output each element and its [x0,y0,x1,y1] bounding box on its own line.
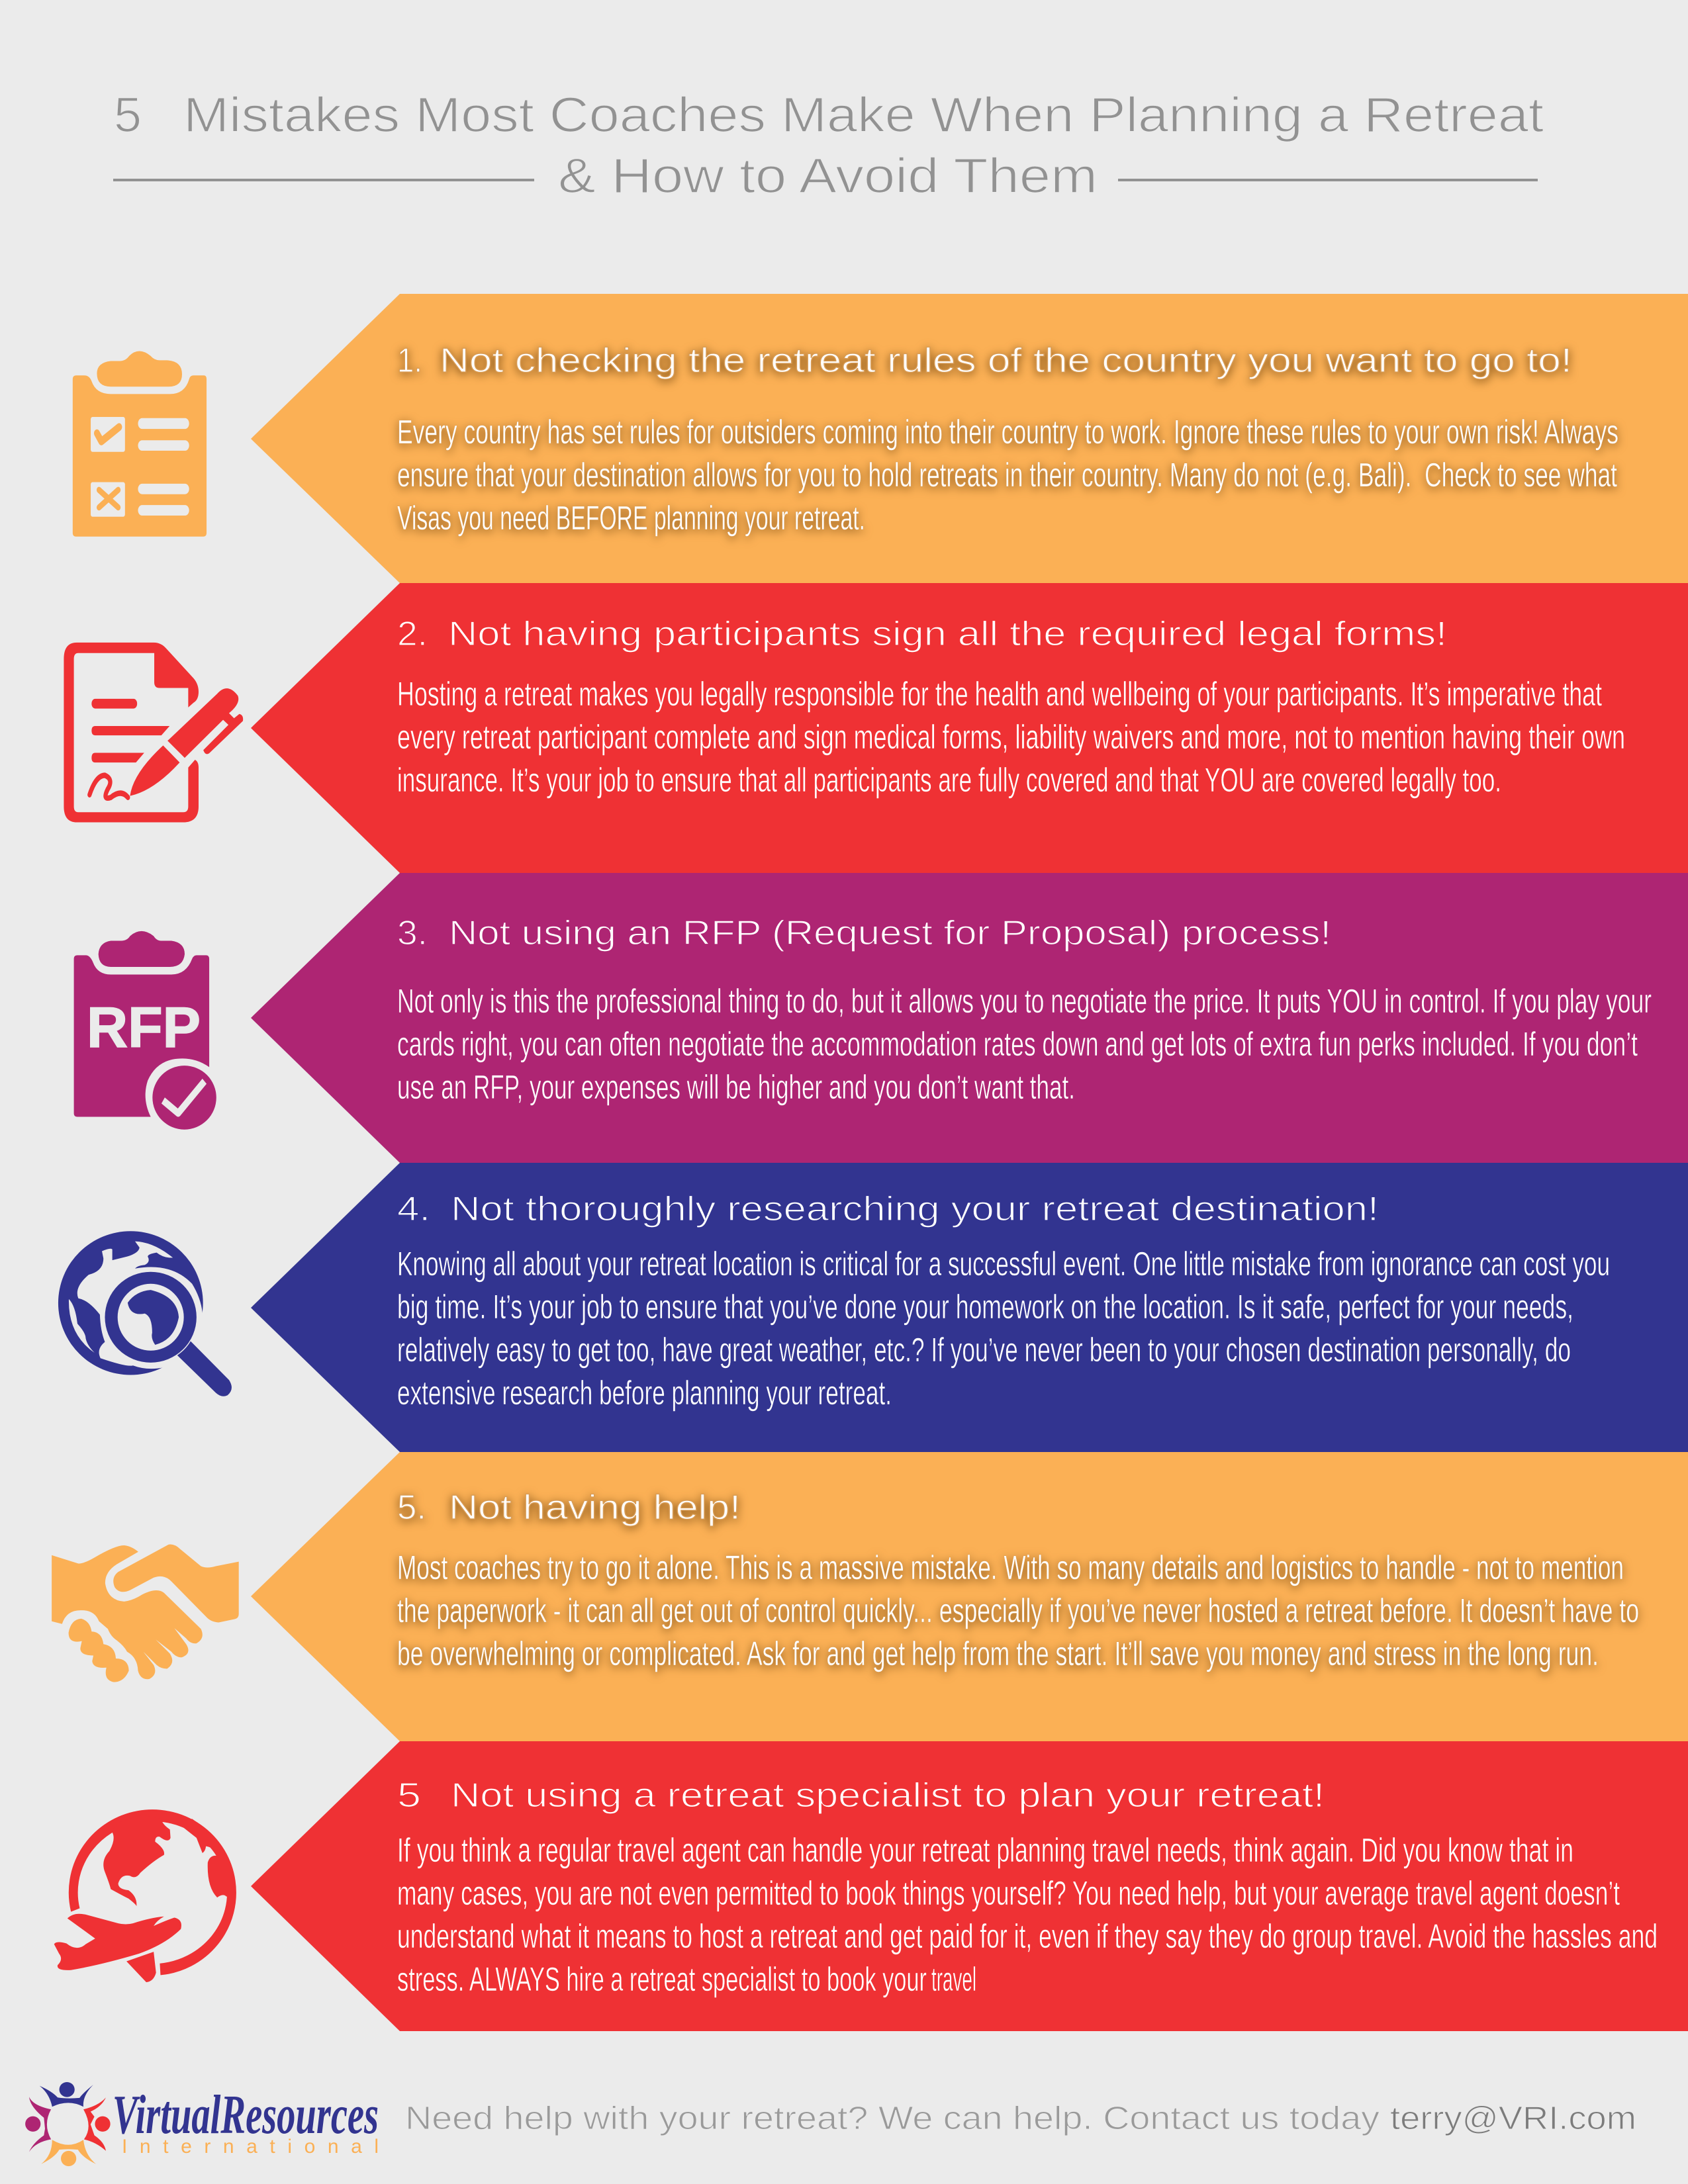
panel: mistake 5 (specialist) [251,1741,1688,2031]
subtitle with rules: & How to Avoid Them [558,148,1098,203]
logo: Virtual Resources International [25,2082,379,2166]
body text 5 [397,1549,1639,1672]
icon: RFP clipboard [74,931,216,1130]
heading 5: 5. [397,1488,426,1527]
title: 5 [114,87,142,142]
heading 3: 3. [397,914,428,952]
panel: mistake 4 [251,1163,1688,1452]
heading 4: 4. [397,1190,430,1228]
body text 6 [397,1831,1658,1998]
title: Mistakes Most Coaches Make When Planning a Retreat [183,87,1544,142]
body text 1: Visas you need BEFORE planning your retreat. [397,499,865,537]
heading 3: Not using an RFP (Request for Proposal) process! [449,914,1331,952]
body text 3 [397,982,1652,1106]
icon: document and pen [64,643,243,823]
body text 2 [397,675,1625,799]
subtitle with rules [113,148,1538,203]
icon: handshake [52,1545,239,1682]
heading 2: Not having participants sign all the required legal forms! [448,615,1447,653]
panel: mistake 3 [251,873,1688,1163]
panel: mistake 1 [251,294,1688,583]
footer call to action [405,2101,1636,2136]
body text 4: extensive research before planning your retreat. [397,1374,892,1412]
body text 3: use an RFP, your expenses will be higher and you don’t want that. [397,1068,1075,1106]
heading 4: Not thoroughly researching your retreat destination! [451,1190,1379,1228]
logo: Virtual Resources International: VirtualResources [113,2084,379,2146]
heading 2: 2. [397,615,428,653]
heading 6: 5 [397,1776,421,1815]
body text 6: travel [931,1960,976,1998]
icon: globe and airplane [54,1815,234,1982]
heading 5: Not having help! [449,1488,741,1527]
heading 1: Not checking the retreat rules of the country you want to go to! [440,341,1572,380]
panel: mistake 5 (help) [251,1452,1688,1741]
heading 1: 1. [397,341,422,380]
heading 6: Not using a retreat specialist to plan your retreat! [451,1776,1325,1815]
icon: globe and magnifier [58,1231,232,1396]
body text 6: stress. ALWAYS hire a retreat specialist to book your [397,1960,927,1998]
logo mark [25,2082,111,2166]
logo: Virtual Resources International: International [122,2136,379,2158]
icon: RFP clipboard: RFP [87,996,201,1060]
panel: mistake 2 [251,583,1688,873]
body text 1 [397,413,1618,537]
body text 4 [397,1245,1610,1412]
icon: clipboard checklist [73,351,207,537]
footer call to action: terry@VRI.com [1390,2101,1636,2136]
footer call to action: Need help with your retreat? We can help. Contact us today [405,2101,1380,2136]
